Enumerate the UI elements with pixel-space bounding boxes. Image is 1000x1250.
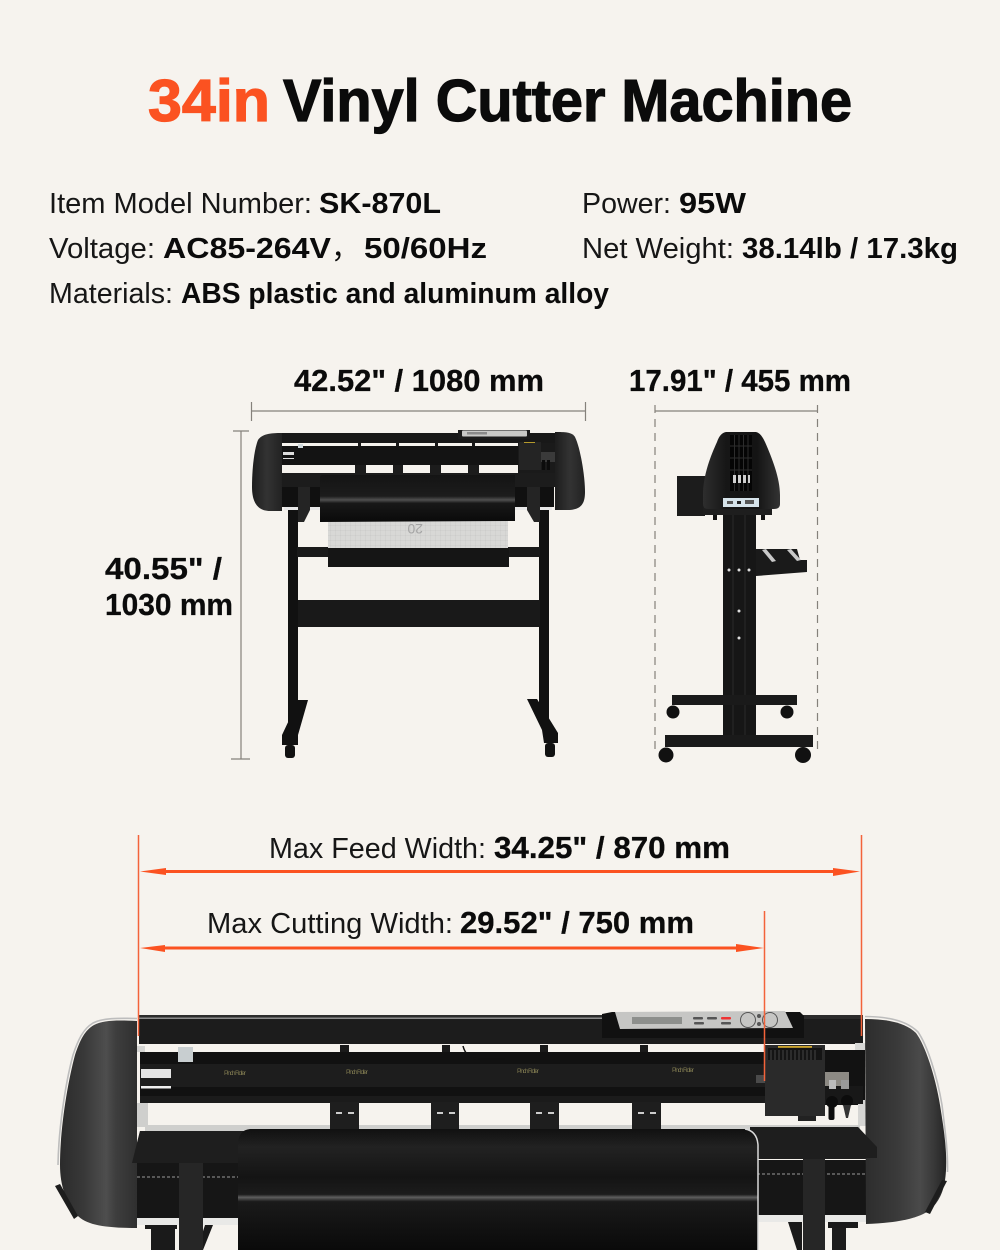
side column <box>723 510 756 738</box>
pinch roller captions <box>224 1067 695 1077</box>
cutting head <box>519 442 555 470</box>
spec: item model number <box>49 188 441 220</box>
title: 34in <box>148 68 270 134</box>
pinch rollers <box>355 465 479 474</box>
paper sheet <box>328 520 508 549</box>
right end cap <box>858 1016 948 1224</box>
top beam <box>139 1015 863 1044</box>
max cutting width label: 29.52" / 750 mm <box>460 906 694 940</box>
body band <box>282 433 555 473</box>
cable <box>463 1046 505 1059</box>
side view of machine on stand <box>658 432 813 763</box>
side base feet and casters <box>658 695 813 763</box>
dimension bracket: height <box>231 431 250 759</box>
max feed width label <box>269 831 730 865</box>
spec: voltage <box>49 233 487 265</box>
measurement: max feed width <box>140 831 860 876</box>
spec: net weight <box>582 233 958 265</box>
dimension bracket: depth <box>655 405 818 755</box>
lower paper roller <box>328 548 509 567</box>
paper roll <box>238 1129 758 1250</box>
spec: power <box>582 188 747 220</box>
dimension label: height: 1030 mm <box>105 588 233 622</box>
paper sheet: 20 <box>407 521 423 537</box>
legs and lower frame <box>137 1158 868 1250</box>
side head housing <box>703 432 780 520</box>
barcode label <box>141 1069 171 1078</box>
specification list <box>49 188 958 310</box>
control panel <box>602 1011 804 1038</box>
reference line: cutting width right <box>764 911 766 1081</box>
max feed width label: 34.25" / 870 mm <box>494 831 730 865</box>
side paper tray <box>756 549 807 576</box>
reference line: feed width left <box>138 835 140 1036</box>
spec: materials: Materials: <box>49 278 173 310</box>
left end cap <box>252 433 282 511</box>
stand legs and feet <box>282 510 558 758</box>
dimension label: height <box>105 552 233 622</box>
cutting carriage <box>756 1045 825 1121</box>
pinch roller captions: Pinch Roller <box>346 1069 369 1076</box>
lower bar <box>132 1124 877 1163</box>
title: Vinyl Cutter Machine <box>283 68 852 134</box>
right end cap <box>555 432 585 510</box>
reference line: feed width right <box>860 835 862 1036</box>
white strip <box>141 1086 171 1088</box>
spec: net weight: Net Weight: <box>582 233 734 265</box>
spec: voltage: 50/60Hz <box>364 233 487 265</box>
left end cap <box>55 1018 140 1228</box>
front view of machine on stand <box>252 430 585 758</box>
dimension label: height: 40.55" / <box>105 552 223 586</box>
blade holders <box>825 1072 863 1120</box>
dimension bracket: width <box>251 402 586 421</box>
pinch roller captions: Pinch Roller <box>224 1070 247 1077</box>
dimension label: width: 42.52" / 1080 mm <box>294 364 544 398</box>
spec: voltage: Voltage: <box>49 233 155 265</box>
spec: power: Power: <box>582 188 671 220</box>
max cutting width arrow <box>140 944 764 952</box>
spec: voltage: ， <box>331 233 360 265</box>
spec: materials: ABS plastic and aluminum alloy <box>181 278 609 310</box>
pinch roller captions: Pinch Roller <box>517 1068 540 1075</box>
spec: item model number: SK-870L <box>319 188 441 220</box>
pinch roller captions: Pinch Roller <box>672 1067 695 1074</box>
paper roll <box>320 475 515 522</box>
spec: item model number: Item Model Number: <box>49 188 312 220</box>
max cutting width label <box>207 906 694 940</box>
side media box <box>677 476 705 516</box>
spec: net weight: 38.14lb / 17.3kg <box>742 233 958 265</box>
spec: voltage: AC85-264V <box>163 233 332 265</box>
pinch roller brackets <box>330 1102 661 1134</box>
control panel <box>458 430 530 439</box>
max feed width arrow <box>140 868 860 876</box>
close-up of machine front <box>55 1011 948 1250</box>
dimension label: depth: 17.91" / 455 mm <box>629 364 851 398</box>
spec: power: 95W <box>679 188 747 220</box>
lower bar <box>281 473 557 522</box>
media rail band <box>135 1043 868 1127</box>
max feed width label: Max Feed Width: <box>269 833 486 865</box>
measurement: max cutting width <box>140 906 764 952</box>
max cutting width label: Max Cutting Width: <box>207 908 453 940</box>
paper clip <box>178 1047 193 1062</box>
